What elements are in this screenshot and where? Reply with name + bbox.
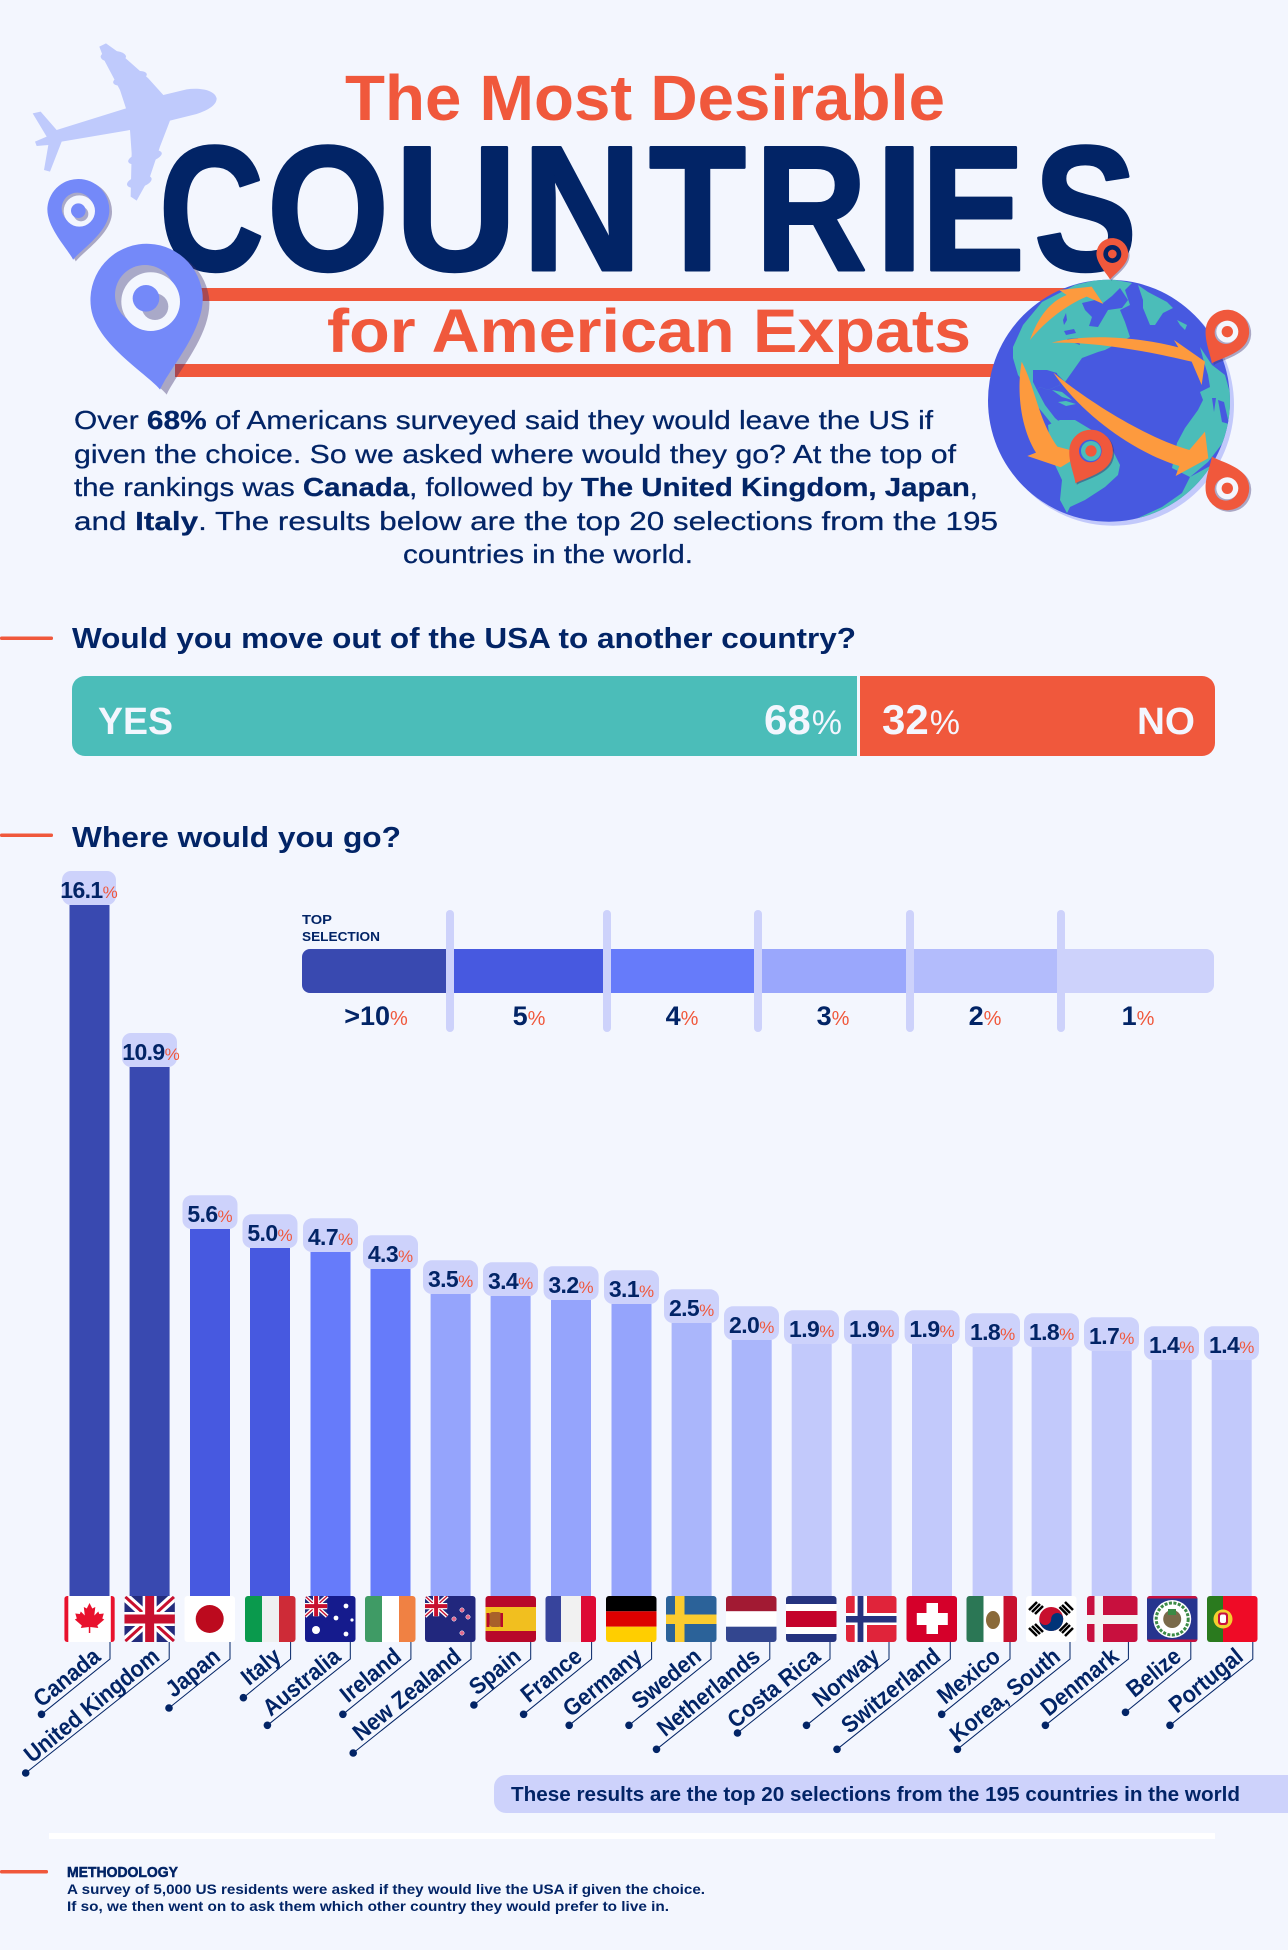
bar: Costa Rica: 1.9% (789, 1316, 834, 1342)
chart: yes/no bar: NO (1137, 701, 1195, 743)
bar: United Kingdom: 10.9% (122, 1039, 180, 1065)
chart: yes/no bar: YES (98, 701, 173, 743)
bar: Korea, South: 1.8% (1029, 1319, 1074, 1345)
legend: SELECTION (302, 929, 380, 944)
bar: Japan (182, 1195, 238, 1596)
bar: Korea, South (1024, 1313, 1079, 1596)
bar: Costa Rica (784, 1310, 839, 1596)
bar chart: where Americans would go (60, 871, 1259, 1596)
intro paragraph: Over 68% of Americans surveyed said they would leave the US if (74, 405, 934, 435)
flag: United Kingdom (124, 1596, 175, 1642)
legend: TOP (302, 912, 332, 927)
bar: Switzerland (905, 1310, 960, 1596)
bar: Spain: 3.4% (488, 1268, 533, 1294)
bar: Norway: 1.9% (849, 1316, 894, 1342)
flag: Spain (486, 1596, 536, 1642)
bar: Italy (242, 1214, 298, 1596)
bar: Netherlands: 2.0% (729, 1312, 774, 1338)
flag: Germany (606, 1596, 656, 1642)
arrow: to Asia (1052, 337, 1205, 385)
title: COUNTRIES: R (755, 109, 867, 308)
title: The Most Desirable: The Most Desirable (345, 62, 945, 134)
label: France: France (516, 1643, 587, 1708)
bar: Germany: 3.1% (609, 1276, 654, 1302)
flag: France (546, 1596, 596, 1642)
label: Australia: Australia (258, 1643, 346, 1721)
legend: 3% (817, 1001, 850, 1031)
flag: Costa Rica (786, 1596, 836, 1642)
flag: Ireland (365, 1596, 416, 1642)
title: COUNTRIES: E (921, 109, 1025, 308)
bar: Denmark: 1.7% (1089, 1323, 1134, 1349)
title: COUNTRIES: C (159, 109, 264, 308)
bar: Sweden: 2.5% (669, 1295, 714, 1321)
arrow: to South America (1020, 362, 1070, 467)
label: United Kingdom: United Kingdom (19, 1643, 164, 1768)
pin: right (1192, 302, 1259, 375)
icon: globe with arrows and pins (988, 237, 1259, 526)
bar: Italy: 5.0% (247, 1220, 293, 1246)
title rule: bottom (175, 364, 1005, 377)
bar: Japan: 5.6% (187, 1201, 233, 1227)
bar: Belize: 1.4% (1149, 1332, 1194, 1358)
intro paragraph: and Italy . The results below are the top 20 selections from the 195 (74, 506, 998, 536)
intro paragraph: the rankings was Canada , followed by The United Kingdom, Japan , (74, 472, 978, 502)
label: Belize: Belize (1121, 1643, 1186, 1702)
pin: bottom right (1192, 447, 1259, 519)
flag: New Zealand (425, 1596, 476, 1642)
bar: Spain (483, 1262, 538, 1596)
legend: >10% (344, 1001, 408, 1031)
label: Italy: Italy (236, 1643, 286, 1690)
bar: Australia: 4.7% (308, 1224, 353, 1250)
methodology (67, 1865, 705, 1914)
icon: small blue location pin (42, 176, 115, 265)
label: Ireland: Ireland (335, 1643, 406, 1708)
chart: yes/no bar: 32% (882, 696, 960, 743)
arrow: to Africa (1053, 373, 1208, 476)
flag: Japan (184, 1596, 235, 1642)
flag: Mexico (966, 1596, 1017, 1642)
label: Denmark: Denmark (1036, 1643, 1124, 1721)
intro paragraph: countries in the world. (403, 539, 693, 569)
icon: large blue location pin (83, 236, 222, 403)
legend: 5% (513, 1001, 546, 1031)
flag: Belize (1147, 1596, 1198, 1642)
bar: New Zealand: 3.5% (428, 1266, 473, 1292)
callout: top 20 note (494, 1775, 1288, 1813)
bar: Sweden (664, 1289, 719, 1596)
bar: Norway (844, 1310, 899, 1596)
legend: 4% (666, 1001, 699, 1031)
bar: New Zealand (423, 1260, 478, 1596)
bar: Canada: 16.1% (60, 877, 118, 903)
label: Costa Rica: Costa Rica (722, 1643, 826, 1733)
arrow: to Europe (1030, 287, 1103, 340)
label: Canada: Canada (28, 1643, 106, 1712)
title: COUNTRIES: U (395, 109, 517, 308)
bar: United Kingdom (122, 1033, 180, 1596)
title rule: top (195, 288, 1075, 301)
label: Portugal: Portugal (1164, 1643, 1248, 1718)
country labels with leader lines (19, 1642, 1253, 1777)
bar: Ireland (363, 1235, 418, 1596)
title: COUNTRIES: T (649, 109, 746, 308)
bar: Mexico: 1.8% (970, 1319, 1015, 1345)
flag: Korea, South (1026, 1596, 1076, 1642)
bar: Portugal (1204, 1326, 1259, 1596)
label: Switzerland: Switzerland (836, 1643, 945, 1738)
flag: Portugal (1207, 1596, 1258, 1642)
intro paragraph: given the choice. So we asked where would they go? At the top of (74, 439, 957, 469)
pin: top (1094, 237, 1131, 282)
callout: top 20 note: These results are the top 20 selections from the 195 countries in the world (511, 1784, 1240, 1806)
title: COUNTRIES: I (875, 109, 924, 308)
bar: Germany (604, 1270, 659, 1596)
flag: Switzerland (906, 1596, 957, 1642)
methodology: A survey of 5,000 US residents were asked if they would live the USA if given the choice. (67, 1881, 705, 1897)
methodology: If so, we then went on to ask them which other country they would prefer to live in. (67, 1898, 669, 1914)
pin: centre (1056, 422, 1122, 494)
section marker (0, 1870, 48, 1874)
chart: yes/no bar (72, 676, 1215, 756)
flag: Australia (305, 1596, 356, 1642)
chart: yes/no bar: 68% (764, 696, 842, 743)
bar: Netherlands (724, 1306, 779, 1596)
bar: France (544, 1266, 599, 1596)
flag: Denmark (1087, 1596, 1138, 1642)
title: COUNTRIES: N (522, 109, 642, 308)
bar: Mexico (965, 1313, 1020, 1596)
bar: Ireland: 4.3% (368, 1241, 413, 1267)
flag: Netherlands (726, 1596, 776, 1642)
methodology: METHODOLOGY (67, 1865, 178, 1881)
label: Korea, South: Korea, South (945, 1643, 1065, 1747)
label: Sweden: Sweden (627, 1643, 706, 1714)
bar: Australia (303, 1218, 358, 1596)
bar: Switzerland: 1.9% (909, 1316, 955, 1342)
bar: France: 3.2% (548, 1272, 594, 1298)
section marker (0, 834, 53, 837)
heading: Would you move: Would you move out of the USA to another country? (72, 623, 856, 655)
heading: Where would you go: Where would you go? (72, 822, 401, 854)
section marker (0, 636, 53, 640)
title: COUNTRIES: O (267, 109, 389, 308)
bar: Denmark (1084, 1317, 1139, 1596)
flag: Italy (245, 1596, 296, 1642)
label: Germany: Germany (558, 1643, 647, 1722)
label: Norway: Norway (807, 1643, 885, 1712)
bar: Portugal: 1.4% (1209, 1332, 1254, 1358)
label: Mexico: Mexico (932, 1643, 1005, 1709)
legend: 2% (969, 1001, 1002, 1031)
label: Netherlands: Netherlands (652, 1643, 765, 1741)
label: New Zealand: New Zealand (348, 1643, 466, 1746)
flag: Canada (64, 1596, 115, 1642)
flag: Sweden (666, 1596, 716, 1642)
title: COUNTRIES: S (1034, 109, 1137, 308)
legend: 1% (1122, 1001, 1155, 1031)
legend (302, 910, 1214, 1032)
intro paragraph (74, 405, 998, 569)
bar: Belize (1144, 1326, 1199, 1596)
label: Japan: Japan (160, 1643, 225, 1702)
flags row (64, 1596, 1257, 1642)
icon: airplane (33, 43, 217, 201)
bar: Canada (60, 871, 118, 1596)
title: for American Expats: for American Expats (327, 297, 971, 365)
label: Spain: Spain (464, 1643, 526, 1700)
flag: Norway (846, 1596, 896, 1642)
